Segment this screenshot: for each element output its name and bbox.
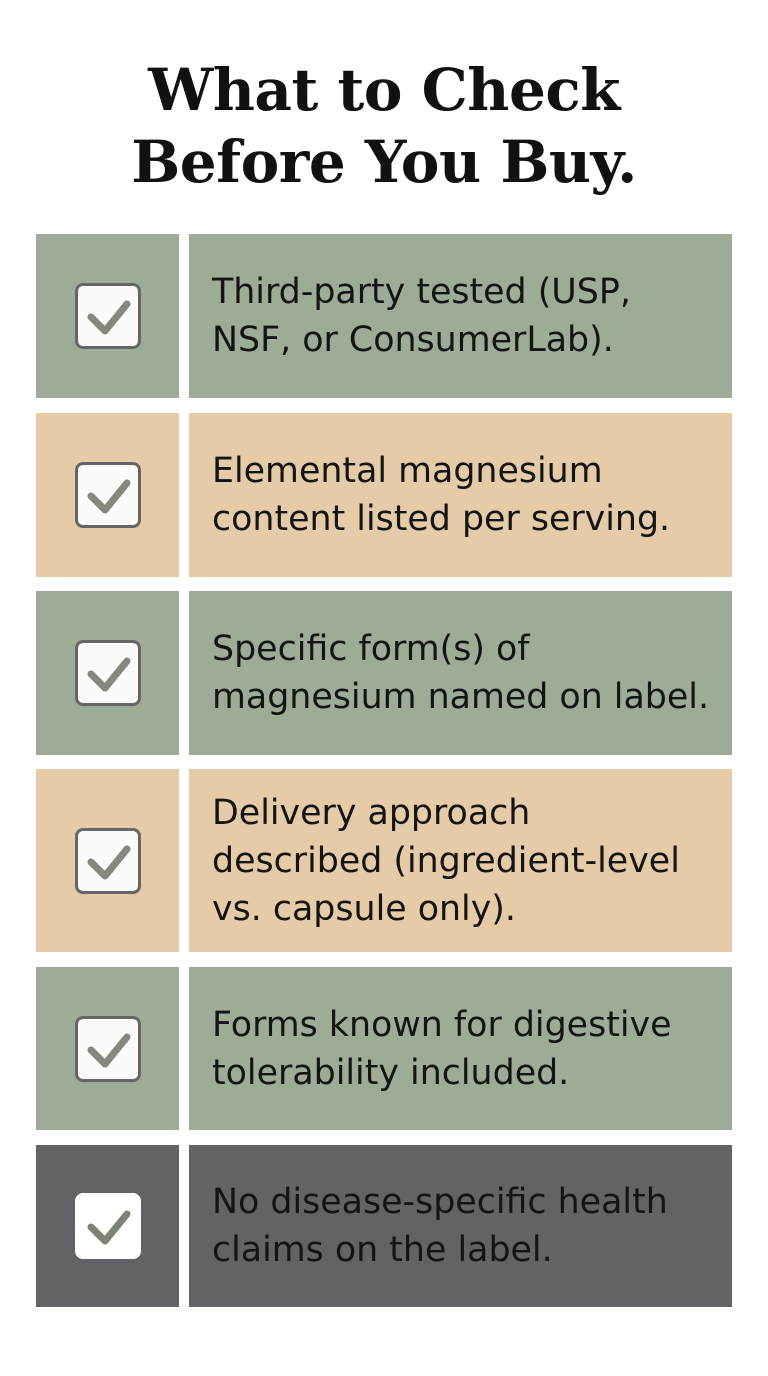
text: elemental magnesium: content listed per serving. bbox=[212, 499, 670, 539]
row 6 bbox=[36, 1145, 732, 1307]
title bbox=[131, 56, 637, 196]
text: specific forms bbox=[189, 591, 732, 755]
title: Before You Buy. bbox=[131, 128, 637, 196]
text: no disease claims: No disease-specific health bbox=[212, 1182, 668, 1222]
text: third-party tested: Third-party tested (USP, bbox=[212, 272, 631, 312]
text: delivery approach: Delivery approach bbox=[212, 792, 530, 832]
icon: checkbox bbox=[36, 769, 179, 952]
text: elemental magnesium: Elemental magnesium bbox=[212, 451, 603, 491]
icon: checkbox bbox=[36, 967, 179, 1130]
text: no disease claims: claims on the label. bbox=[212, 1230, 553, 1270]
icon: checkbox bbox=[36, 591, 179, 755]
text: third-party tested bbox=[189, 234, 732, 398]
row 3 bbox=[36, 591, 732, 755]
icon: checkbox bbox=[36, 1145, 179, 1307]
text: specific forms: magnesium named on label. bbox=[212, 677, 709, 717]
row 2 bbox=[36, 413, 732, 577]
text: no disease claims bbox=[189, 1145, 732, 1307]
text: digestive tolerability: Forms known for digestive bbox=[212, 1004, 672, 1044]
text: delivery approach bbox=[189, 769, 732, 952]
text: delivery approach: vs. capsule only). bbox=[212, 888, 516, 928]
row 5 bbox=[36, 967, 732, 1130]
title: What to Check bbox=[148, 56, 620, 124]
text: digestive tolerability: tolerability included. bbox=[212, 1052, 569, 1092]
icon: checkbox bbox=[36, 234, 179, 398]
row 4 bbox=[36, 769, 732, 952]
icon: checkbox bbox=[36, 413, 179, 577]
text: elemental magnesium bbox=[189, 413, 732, 577]
text: delivery approach: described (ingredient-level bbox=[212, 840, 680, 880]
text: digestive tolerability bbox=[189, 967, 732, 1130]
row 1 bbox=[36, 234, 732, 398]
text: third-party tested: NSF, or ConsumerLab). bbox=[212, 320, 614, 360]
text: specific forms: Specific form(s) of bbox=[212, 629, 530, 669]
